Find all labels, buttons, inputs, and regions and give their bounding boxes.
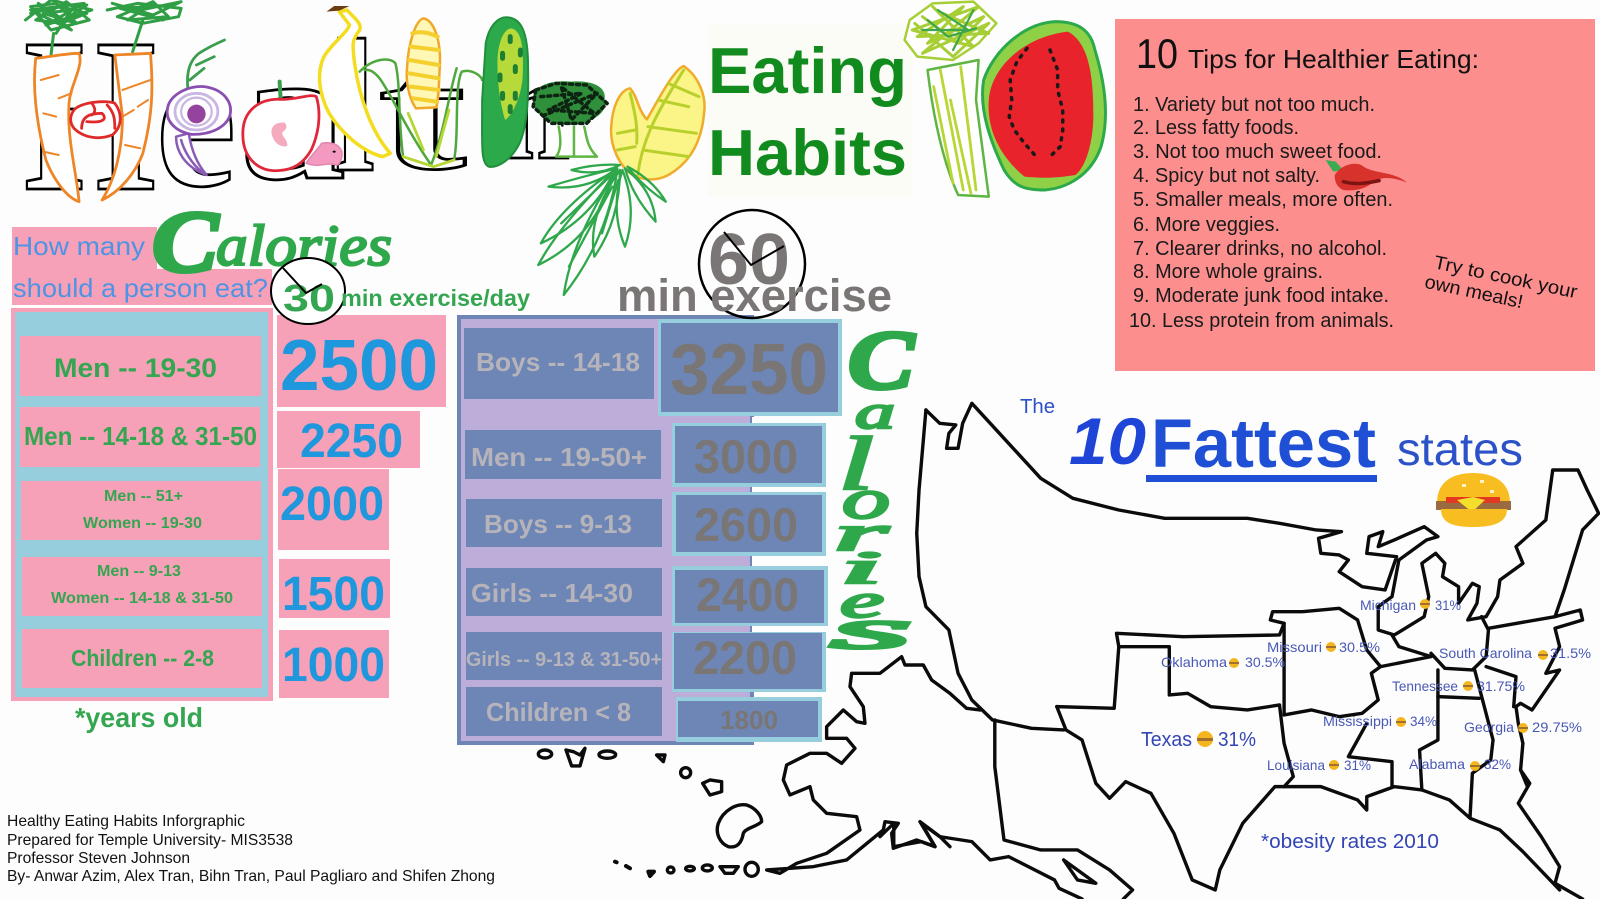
title: Healthy lettering with vegetables: a <box>240 10 346 220</box>
values: calories 60 minute exercise: 2600 <box>694 498 798 551</box>
row: men 19-30 <box>20 336 261 396</box>
icon: cucumber <box>482 17 528 167</box>
script word: vertical Calories: a <box>855 386 895 439</box>
label: Tennessee: Tennessee <box>1392 678 1458 694</box>
heading: 10 fattest states: states <box>1397 423 1523 475</box>
label: Georgia: 29.75% <box>1532 719 1582 735</box>
label: Texas: Texas <box>1141 729 1192 751</box>
list: tips: 2. Less fatty foods. <box>1133 117 1299 139</box>
title: Healthy lettering with vegetables: h <box>500 25 570 191</box>
values: calories 60 minute exercise: 3250 <box>670 330 828 410</box>
callout: cook your own meals: own meals! <box>1423 272 1525 313</box>
footer: credits <box>7 813 495 885</box>
title: Healthy lettering with vegetables: l <box>335 2 375 212</box>
row: children 2-8: Children -- 2-8 <box>71 645 214 671</box>
map: contiguous states <box>880 403 1599 899</box>
list: tips: 1. Variety but not too much. <box>1133 94 1375 116</box>
row: men 51+ women 19-30: Women -- 19-30 <box>83 515 202 532</box>
list: tips: 8. More whole grains. <box>1133 261 1323 283</box>
icon: carrot left <box>26 0 92 202</box>
values: calories 30 minute exercise <box>277 315 446 698</box>
title: Healthy lettering with vegetables <box>24 0 705 295</box>
icon: chili pepper <box>1326 160 1407 190</box>
row: boys 14-18: Boys -- 14-18 <box>476 347 640 377</box>
icon: 30 minute clock: 30 <box>283 278 335 320</box>
values: calories 60 minute exercise: 2400 <box>696 568 799 621</box>
script word: vertical Calories: i <box>840 542 882 593</box>
label: Missouri <box>1267 639 1380 655</box>
icon: carrot right <box>102 2 181 200</box>
row: men 51+ women 19-30 <box>21 481 261 540</box>
label: Mississippi: 34% <box>1410 713 1437 729</box>
values: calories 60 minute exercise: 1800 <box>720 705 778 735</box>
panel: 10 tips for healthier eating <box>1115 19 1595 371</box>
callout: cook your own meals: Try to cook your <box>1432 252 1580 303</box>
label: South Carolina: South Carolina <box>1439 645 1532 661</box>
heading: 10 fattest states: Fattest <box>1151 405 1376 482</box>
heading: 10 fattest states: 10 <box>1069 404 1146 478</box>
row: children 2-8 <box>22 629 262 688</box>
row: men 51+ women 19-30: Men -- 51+ <box>104 488 183 505</box>
label: Mississippi: Mississippi <box>1323 713 1392 729</box>
label: min exercise per day: min exercise/day <box>341 285 530 311</box>
icon: apple <box>243 82 319 171</box>
row: men 19-30: Men -- 19-30 <box>54 353 217 383</box>
values: calories 30 minute exercise: 2250 <box>300 415 403 468</box>
icon: onion <box>167 40 231 175</box>
row: girls 14-30: Girls -- 14-30 <box>471 578 633 608</box>
script word: vertical Calories: l <box>838 422 874 506</box>
map: Alaska <box>538 657 980 876</box>
icon: celery <box>905 2 996 197</box>
icon: broccoli <box>533 81 607 157</box>
heading: 10 fattest states: The <box>1020 396 1055 418</box>
row: men 9-13 women 14-18 and 31-50: Women -- 14-18 & 31-50 <box>51 590 233 607</box>
heading: how many calories: should a person eat? <box>13 273 268 303</box>
footer: credits: Healthy Eating Habits Inforgraphic <box>7 813 245 830</box>
heading: tips <box>1136 30 1479 77</box>
title: Eating Habits: Eating <box>708 34 907 107</box>
row: girls 14-30 <box>466 568 662 616</box>
label: South Carolina: 31.5% <box>1550 645 1591 661</box>
values: calories 60 minute exercise: 2200 <box>693 631 797 684</box>
heading: tips: Tips for Healthier Eating: <box>1188 44 1479 74</box>
note: years old: *years old <box>75 702 203 733</box>
script word: vertical Calories <box>830 314 915 661</box>
row: boys 14-18 <box>464 328 654 399</box>
row: men 9-13 women 14-18 and 31-50: Men -- 9-13 <box>97 563 181 580</box>
list: tips <box>1129 94 1394 332</box>
icon: banana <box>320 6 390 157</box>
label: Texas: 31% <box>1218 729 1256 751</box>
script word: alories: alories <box>216 213 392 278</box>
label: Missouri: Missouri <box>1267 639 1322 655</box>
note: obesity rates 2010: *obesity rates 2010 <box>1261 831 1439 853</box>
values: calories 60 minute exercise: 3000 <box>694 430 798 483</box>
row: girls 9-13 and 31-50+ <box>466 632 662 680</box>
heading: how many calories: How many <box>13 231 145 261</box>
values: calories 60 minute exercise <box>658 319 842 742</box>
title: Healthy lettering with vegetables: e <box>156 8 236 229</box>
values: calories 30 minute exercise: 2000 <box>280 478 384 531</box>
label: Oklahoma: Oklahoma <box>1161 654 1227 670</box>
label: Alabama: 32% <box>1484 756 1511 772</box>
icon: pineapple leaves <box>538 165 666 295</box>
icon: pineapple fruit <box>611 66 705 179</box>
label: Tennessee: 31.75% <box>1477 678 1525 694</box>
script word: vertical Calories: C <box>848 314 915 407</box>
icon: worm <box>306 143 342 165</box>
label: Michigan: 31% <box>1435 597 1461 613</box>
icon: 60 minute clock <box>699 210 805 318</box>
title: Eating Habits: Habits <box>708 116 907 189</box>
label: Alabama <box>1409 756 1511 772</box>
icon: celery and watermelon <box>905 2 1105 197</box>
row: boys 9-13: Boys -- 9-13 <box>484 509 632 539</box>
script word: vertical Calories: r <box>834 505 889 561</box>
row: men 14-18 and 31-50 <box>20 407 260 467</box>
label: Alabama: Alabama <box>1409 756 1465 772</box>
heading: how many calories <box>12 194 272 305</box>
label: Texas <box>1141 729 1256 751</box>
script word: big C of Calories: C <box>152 194 219 291</box>
list: tips: 3. Not too much sweet food. <box>1133 141 1382 163</box>
row: children under 8 <box>466 687 662 736</box>
row: men 14-18 and 31-50: Men -- 14-18 & 31-50 <box>24 421 257 451</box>
list: tips: 10. Less protein from animals. <box>1129 310 1394 332</box>
icon: corn <box>360 18 482 167</box>
label: Georgia: Georgia <box>1464 719 1514 735</box>
list: tips: 7. Clearer drinks, no alcohol. <box>1133 238 1387 260</box>
title: Eating Habits <box>708 25 912 197</box>
label: Louisiana <box>1267 757 1371 773</box>
list: tips: 9. Moderate junk food intake. <box>1133 285 1389 307</box>
row: men 19-50+: Men -- 19-50+ <box>471 442 647 472</box>
list: tips: 4. Spicy but not salty. <box>1133 165 1320 187</box>
row: children under 8: Children < 8 <box>486 697 631 727</box>
values: calories 30 minute exercise: 1500 <box>282 568 385 621</box>
row: boys 9-13 <box>466 499 662 547</box>
map: United States outline with Alaska <box>538 403 1599 899</box>
label: Mississippi <box>1323 713 1437 729</box>
panel: 30 minute exercise calorie table <box>11 308 273 701</box>
footer: credits: Prepared for Temple University- MIS3538 <box>7 832 293 849</box>
label: Louisiana: 31% <box>1344 757 1371 773</box>
label: Michigan <box>1360 597 1461 613</box>
script word: vertical Calories: e <box>840 575 884 628</box>
label: South Carolina <box>1439 645 1591 661</box>
heading: 10 fattest states <box>1020 396 1523 482</box>
values: calories 30 minute exercise: 1000 <box>282 639 385 692</box>
row: girls 9-13 and 31-50+: Girls -- 9-13 & 31-50+ <box>466 649 662 671</box>
title: Healthy lettering with vegetables: t <box>378 17 466 205</box>
title: Healthy lettering with vegetables: H <box>24 0 156 237</box>
label: min exercise: min exercise <box>617 270 892 321</box>
label: Oklahoma <box>1161 654 1285 670</box>
icon: 60 minute clock: 60 <box>708 220 790 300</box>
row: men 9-13 women 14-18 and 31-50 <box>22 557 262 616</box>
row: men 19-50+ <box>465 430 661 479</box>
callout: cook your own meals <box>1423 251 1580 324</box>
icon: watermelon <box>983 22 1105 190</box>
label: Tennessee <box>1392 678 1525 694</box>
list: tips: 6. More veggies. <box>1133 214 1280 236</box>
label: Michigan: Michigan <box>1360 597 1416 613</box>
footer: credits: Professor Steven Johnson <box>7 850 190 867</box>
labels: state obesity rates <box>1141 597 1591 773</box>
list: tips: 5. Smaller meals, more often. <box>1133 189 1393 211</box>
footer: credits: By- Anwar Azim, Alex Tran, Bihn Tran, Paul Pagliaro and Shifen Zhong <box>7 868 495 885</box>
icon: tomato <box>71 102 120 138</box>
label: Louisiana: Louisiana <box>1267 757 1325 773</box>
icon: 30 minute clock <box>271 258 345 324</box>
script word: vertical Calories: s <box>830 599 912 661</box>
icon: big burger <box>1436 473 1511 527</box>
script word: vertical Calories: o <box>842 469 890 531</box>
panel: 60 minute exercise calorie table <box>457 315 760 745</box>
label: Missouri: 30.5% <box>1339 639 1380 655</box>
values: calories 30 minute exercise: 2500 <box>280 326 438 406</box>
label: Oklahoma: 30.5% <box>1245 654 1285 670</box>
heading: tips: 10 <box>1136 30 1178 77</box>
label: Georgia <box>1464 719 1582 735</box>
